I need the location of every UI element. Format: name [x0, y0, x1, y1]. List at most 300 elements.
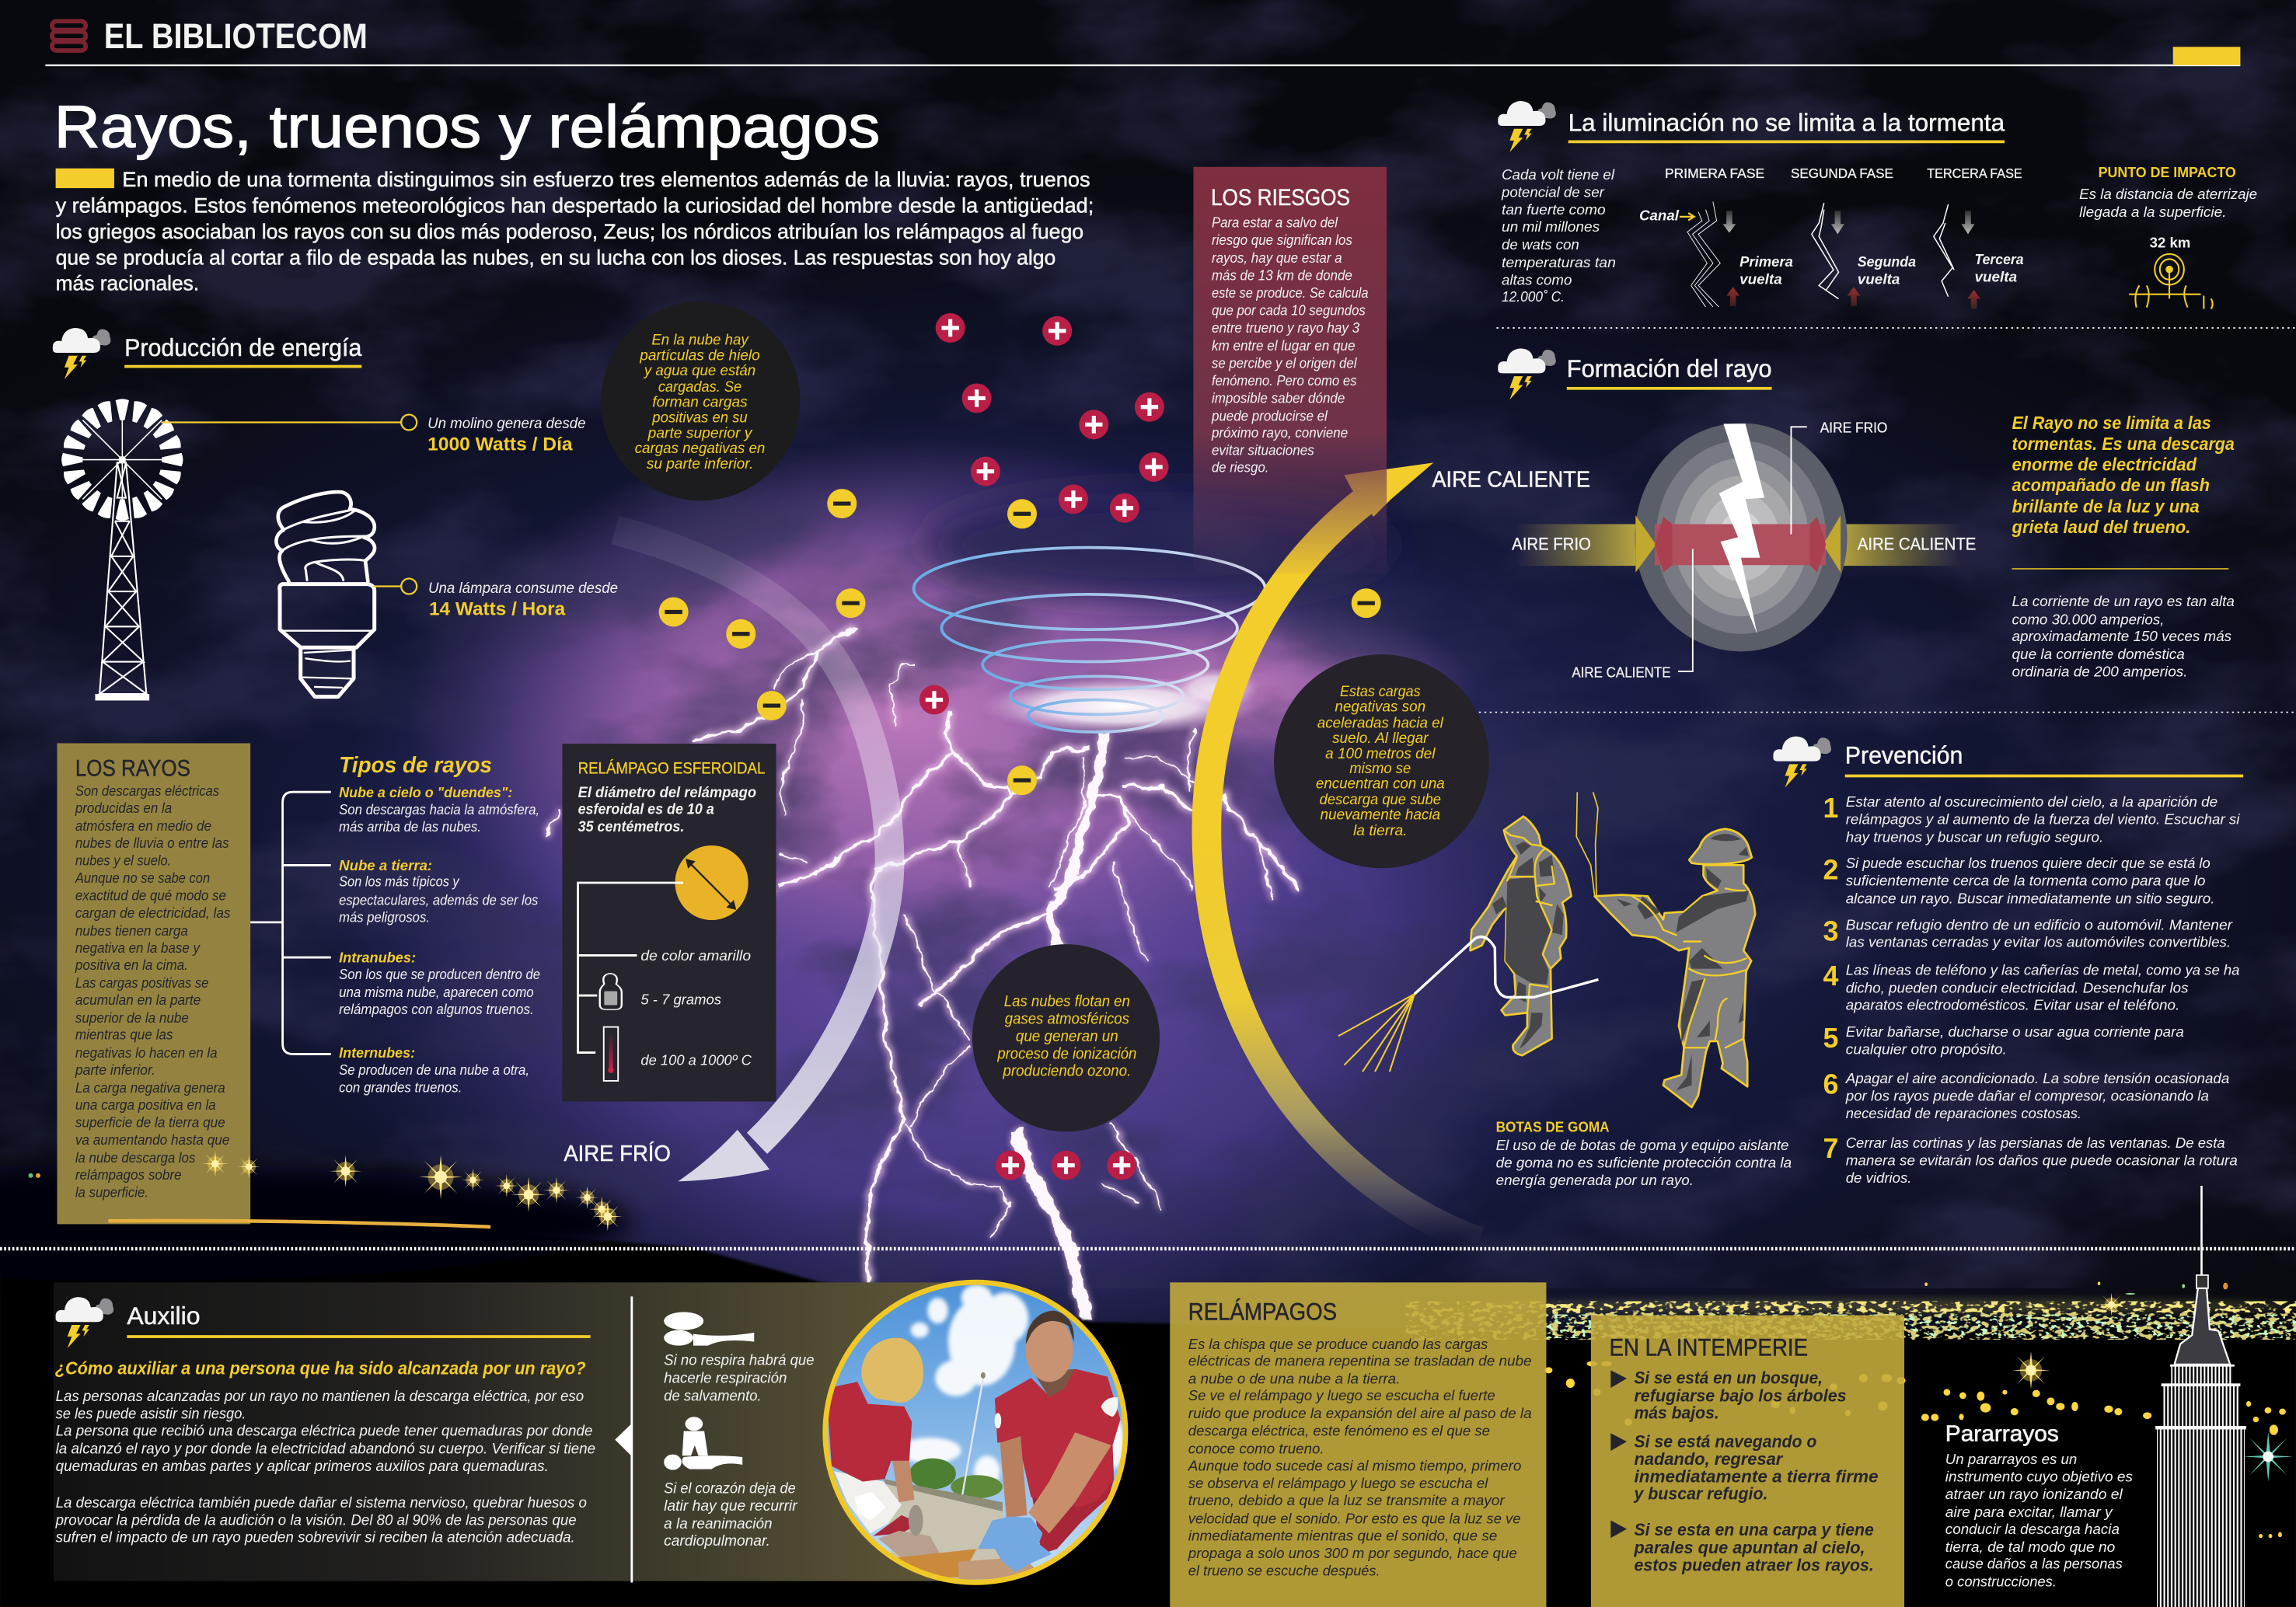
icon: impact target [2129, 254, 2213, 309]
label: aire caliente: AIRE CALIENTE [1432, 466, 1590, 491]
icon: storm cloud [55, 1297, 113, 1348]
callout circle: negative charges: la tierra. [1353, 822, 1408, 839]
water spray [1338, 994, 1415, 1072]
text: CPR: Si el corazón deja de [664, 1481, 796, 1497]
callout: lamp consumption: Una lámpara consume desde [428, 580, 618, 597]
header bar [45, 16, 2240, 66]
text: botas de goma: El uso de de botas de goma y equipo aislante [1496, 1137, 1788, 1153]
body text: km entre el lugar en que [1212, 338, 1356, 354]
callout circle: cloud charges: cargadas. Se [658, 378, 741, 396]
block: tipos de rayos: una misma nube, aparecen como [339, 984, 534, 1000]
bullet texts: Si se esta en una carpa y tiene [1634, 1520, 1874, 1539]
body: trueno, debido a que la luz se transmite a mayor [1188, 1492, 1505, 1508]
body: La carga negativa genera [75, 1079, 225, 1096]
body [1945, 1451, 2134, 1589]
panel: Los rayos [57, 743, 250, 1224]
body text: Para estar a salvo del [1212, 215, 1338, 231]
icon: thermometer [604, 1027, 618, 1081]
callout circle: negative charges: a 100 metros del [1325, 745, 1436, 762]
body: el trueno se escuche después. [1188, 1563, 1380, 1579]
icon: windmill [61, 399, 183, 700]
bullet texts: nadando, regresar [1634, 1449, 1784, 1469]
body: Las cargas positivas se [75, 974, 208, 991]
body text: provocar la pérdida de la audición o la visión. Del 80 al 90% de las personas que [55, 1512, 577, 1529]
body: conoce como trueno. [1188, 1440, 1324, 1456]
text: CPR: cardiopulmonar. [664, 1533, 770, 1549]
section: prevención heading [1773, 737, 2243, 788]
arrows: air pressing [1635, 515, 1841, 573]
section: iluminación heading: La iluminación no se limita a la tormenta [1568, 110, 2005, 137]
body: descarga eléctrica, este fenómeno es el que se [1188, 1423, 1490, 1439]
body text: se les puede asistir sin riesgo. [56, 1407, 246, 1423]
label: temperature: de 100 a 1000º C [640, 1052, 752, 1068]
panel: relámpago esferoidal [562, 744, 776, 1101]
block: punto de impacto: Es la distancia de aterrizaje [2079, 186, 2257, 202]
bullet texts: estos pueden atraer los rayos. [1634, 1555, 1874, 1574]
section: prevención heading: Prevención [1845, 741, 1963, 769]
block: punto de impacto: PUNTO DE IMPACTO [2099, 164, 2236, 180]
block: tipos de rayos: más peligrosos. [339, 909, 430, 926]
text: yellow statement: El Rayo no se limita a las [2012, 413, 2211, 433]
body text: fenómeno. Pero como es [1212, 373, 1356, 389]
concentric ellipses [1635, 423, 1848, 651]
panel: Auxilio [54, 1282, 947, 1583]
intro: El diámetro del relámpago [578, 785, 756, 801]
body: inmediatamente mientras que el sonido, que se [1188, 1528, 1497, 1544]
text: CPR [664, 1481, 798, 1549]
text: CPR: latir hay que recurrir [664, 1498, 798, 1515]
section: formación heading [1498, 348, 1772, 399]
arrow: cold air descending [615, 530, 890, 1181]
bullet texts: y buscar refugio. [1633, 1484, 1767, 1504]
lightning: first phase [1687, 201, 1720, 307]
icon: storm cloud [1773, 737, 1831, 788]
body: cause daños a las personas [1945, 1556, 2123, 1572]
arrows: red up [1726, 287, 1980, 309]
body text: Las personas alcanzadas por un rayo no mantienen la descarga eléctrica, por eso [56, 1389, 584, 1405]
callout circle: cloud charges: y agua que están [643, 362, 755, 379]
numbers: 3 [1823, 915, 1838, 946]
block: tipos de rayos: relámpagos con algunos truenos. [339, 1001, 534, 1017]
body: negativas lo hacen en la [75, 1044, 218, 1061]
callout circle: cloud charges: cargas negativas en [635, 440, 765, 457]
lightning: third phase [1934, 204, 1954, 297]
text: current: La corriente de un rayo es tan alta [2012, 593, 2235, 609]
text: current: que la corriente doméstica [2012, 646, 2185, 662]
hose [1415, 937, 1598, 997]
body: Se ve el relámpago y luego se escucha el fuerte [1188, 1387, 1495, 1403]
intro text: más racionales. [56, 272, 199, 295]
text: botas de goma: de goma no es suficiente protección contra la [1496, 1154, 1792, 1170]
panel: relámpago esferoidal: esferoidal es de 10 a [578, 801, 714, 817]
body: superficie de la tierra que [75, 1114, 225, 1131]
icon: storm cloud [52, 328, 110, 379]
step texts: Cerrar las cortinas y las persianas de las ventanas. De esta [1846, 1135, 2225, 1151]
logo wordmark: EL BIBLIOTECOM [104, 16, 368, 56]
body: conducir la descarga hacia [1945, 1521, 2120, 1537]
callout circle: cloud charges: partículas de hielo [639, 347, 760, 364]
block: tipos de rayos: espectaculares, además de ser los [339, 891, 538, 908]
list: prevention steps [1823, 793, 2240, 1186]
body: Son descargas eléctricas [75, 783, 219, 799]
step texts: de vidrios. [1846, 1170, 1911, 1186]
body: parte inferior. [75, 1061, 155, 1078]
heading: LOS RIESGOS [1211, 186, 1350, 211]
block: punto de impacto: llegada a la superficie. [2079, 204, 2227, 220]
block: tipos de rayos: Son los más típicos y [339, 873, 460, 890]
block: punto de impacto: 32 km [2150, 234, 2190, 250]
divider with pointer [615, 1296, 633, 1583]
callout circle: ionization: Las nubes flotan en [1004, 993, 1130, 1010]
callout circle: cloud charges: su parte inferior. [647, 455, 753, 472]
body: aire para excitar, llamar y [1945, 1504, 2113, 1520]
body text: La descarga eléctrica también puede dañar el sistema nervioso, quebrar huesos o [56, 1495, 587, 1511]
body: Es la chispa que se produce cuando las cargas [1188, 1336, 1488, 1352]
patient and mask [873, 1505, 1044, 1580]
callout circle: negative charges: descarga que sube [1320, 791, 1441, 808]
leader: aire caliente [1678, 549, 1693, 671]
heading: Tipos de rayos [339, 752, 492, 777]
icon: storm cloud [1498, 348, 1556, 399]
text: current [2012, 593, 2235, 679]
intro text: los griegos asociaban los rayos con su dios más poderoso, Zeus; los nórdicos atribuían los relámpagos al fuego [56, 220, 1083, 243]
photo: paramedics performing CPR [816, 1274, 1137, 1591]
labels: AIRE FRIO [1512, 534, 1591, 553]
background: dark horizon and city ground [0, 1164, 2296, 1607]
panel: Relámpagos [1170, 1282, 1546, 1607]
body: se observa el relámpago y luego se escucha el [1188, 1475, 1488, 1491]
step texts: Evitar bañarse, ducharse o usar agua corriente para [1846, 1023, 2184, 1040]
labels: AIRE CALIENTE [1858, 534, 1976, 553]
divider: dotted [1479, 712, 2296, 713]
man [978, 1311, 1121, 1572]
section: iluminación heading [1498, 101, 2005, 152]
block: tipos de rayos: Internubes: [339, 1044, 415, 1061]
labels: vueltas: vuelta [1974, 269, 2017, 285]
block: pararrayos [1945, 1421, 2134, 1589]
body text: La persona que recibió una descarga eléctrica puede tener quemaduras por donde [56, 1424, 592, 1440]
woman [826, 1338, 923, 1533]
body text: puede producirse el [1211, 408, 1328, 424]
body text: sufren el impacto de un rayo pueden sobrevivir si reciben la atención adecuada. [56, 1530, 575, 1546]
body [1188, 1336, 1532, 1579]
text: breathing: Si no respira habrá que [664, 1353, 815, 1369]
bullet texts: Si se está en un bosque, [1634, 1368, 1823, 1388]
intro text: En medio de una tormenta distinguimos sin esfuerzo tres elementos además de la lluvia: rayos, truenos [122, 168, 1090, 191]
lightning: second phase [1812, 203, 1839, 299]
body: atmósfera en medio de [75, 817, 211, 834]
icon: lightning bolt [1719, 424, 1764, 634]
body: superior de la nube [75, 1009, 189, 1026]
intro text [56, 168, 1094, 295]
icon: logo stack [52, 21, 85, 51]
heading: Producción de energía: Producción de energía [124, 334, 362, 361]
body: cargan de electricidad, las [75, 905, 231, 921]
callout circle: negative charges: Estas cargas [1340, 683, 1421, 700]
connector [578, 883, 683, 1053]
step texts: manera se evitarán los daños que puede ocasionar la rotura [1846, 1152, 2238, 1169]
text: yellow statement: tormentas. Es una descarga [2012, 434, 2235, 454]
block: tipos de rayos: Son los que se producen dentro de [339, 966, 540, 982]
intro text: que se producía al cortar a filo de espada las nubes, en su lucha con los dioses. Las respuestas son hoy algo [56, 246, 1056, 269]
body text: la alcanzó el rayo y por donde la electricidad abandonó su cuerpo. Verificar si tiene [56, 1441, 595, 1457]
bullet texts: más bajos. [1634, 1403, 1719, 1423]
step texts: hay truenos y buscar un refugio seguro. [1846, 828, 2103, 845]
body text: evitar situaciones [1212, 443, 1314, 458]
callout circle: ionization: produciendo ozono. [1002, 1063, 1131, 1080]
text: botas de goma [1496, 1118, 1792, 1188]
icon: ball lightning [675, 845, 748, 920]
title: Rayos, truenos y relámpagos [54, 93, 880, 160]
text: CPR: a la reanimación [664, 1516, 773, 1532]
heading: RELÁMPAGO ESFEROIDAL [578, 758, 765, 778]
numbers: 2 [1823, 854, 1838, 885]
block: punto de impacto [2079, 164, 2257, 309]
text: current: ordinaria de 200 amperios. [2012, 663, 2188, 679]
labels: vueltas: Tercera [1974, 251, 2024, 267]
body: velocidad que el sonido. Por esto es que la luz se ve [1188, 1510, 1520, 1526]
labels: AIRE CALIENTE [1572, 664, 1671, 680]
body: va aumentando hasta que [75, 1131, 229, 1148]
callout circle: cloud charges: positivas en su [651, 410, 748, 427]
diagram: lightning formation [1512, 420, 1976, 680]
diagram: three lightning phases [1639, 201, 2024, 309]
callout: lamp consumption [373, 579, 618, 619]
step texts: cualquier otro propósito. [1846, 1041, 2007, 1057]
divider: thick dotted [0, 1248, 2296, 1250]
labels: vueltas: vuelta [1739, 270, 1782, 287]
body: propaga a solo unos 300 m por segundo, hace que [1188, 1545, 1517, 1561]
panel: relámpago esferoidal: 35 centémetros. [578, 819, 684, 835]
step texts: relámpagos y al aumento de la fuerza del viento. Escuchar si [1846, 811, 2240, 828]
text: volt: un mil millones [1502, 218, 1600, 235]
illustration: skyscraper with lightning rod [2155, 1186, 2246, 1607]
block: tipos de rayos: Intranubes: [339, 950, 416, 966]
bullet texts [1633, 1368, 1879, 1574]
body: Aunque todo sucede casi al mismo tiempo, primero [1188, 1457, 1521, 1473]
callout circle: ionization: gases atmosféricos [1005, 1010, 1129, 1027]
body text: imposible saber dónde [1212, 391, 1345, 406]
text: volt [1501, 166, 1616, 305]
step texts: Las líneas de teléfono y las cañerías de metal, como ya se ha [1846, 962, 2239, 978]
phase headings: SEGUNDA FASE [1791, 166, 1893, 181]
body: exactitud de qué modo se [75, 887, 226, 904]
header yellow tab [2173, 47, 2240, 65]
step texts: por los rayos puede dañar el compresor, ocasionando la [1845, 1088, 2209, 1104]
callout: windmill output: 1000 Watts / Día [427, 434, 573, 455]
body: a nube o de una nube a la tierra. [1188, 1370, 1400, 1386]
label: canal: Canal [1639, 207, 1680, 224]
background: ground lights [29, 1151, 623, 1231]
text: breathing: de salvamento. [664, 1388, 762, 1404]
phase headings: TERCERA FASE [1927, 166, 2022, 181]
callout circle: negative charges: encuentran con una [1316, 776, 1445, 793]
bullets [1610, 1370, 1627, 1538]
figure: left worker [1471, 817, 1572, 1055]
body text [55, 1389, 595, 1546]
body: positiva en la cima. [75, 957, 188, 973]
body: Aunque no se sabe con [75, 870, 210, 886]
body: nubes y el suelo. [75, 852, 171, 868]
body text: próximo rayo, conviene [1211, 425, 1348, 441]
text: volt: de wats con [1502, 236, 1579, 253]
block: tipos de rayos: Se producen de una nube a otra, [339, 1061, 529, 1078]
panel: Los riesgos [1193, 167, 1387, 574]
callout circle: negative charges: nuevamente hacia [1321, 807, 1440, 824]
body: eléctricas de manera repentina se trasladan de nube [1188, 1353, 1532, 1369]
text: volt: Cada volt tiene el [1502, 166, 1615, 183]
step texts: Estar atento al oscurecimiento del cielo, a la aparición de [1846, 793, 2217, 810]
icon: light bulb [276, 492, 375, 697]
background: city lights [1406, 1281, 2296, 1538]
heading: EN LA INTEMPERIE [1609, 1334, 1808, 1361]
bullet texts: inmediatamente a tierra firme [1634, 1467, 1879, 1487]
text: current: aproximadamente 150 veces más [2012, 628, 2232, 644]
labels [1512, 420, 1976, 680]
text: yellow statement [2012, 413, 2235, 537]
labels: vueltas: Segunda [1858, 253, 1916, 270]
text: yellow statement: acompañado de un flash [2012, 475, 2210, 495]
body: ruido que produce la expansión del aire al paso de la [1188, 1405, 1532, 1421]
hat [1689, 829, 1752, 864]
numbers: 4 [1823, 960, 1838, 992]
text: volt: temperaturas tan [1502, 254, 1616, 270]
arrow: canal [1680, 213, 1694, 221]
body: tierra, de tal modo que no [1945, 1539, 2115, 1555]
heading: RELÁMPAGOS [1188, 1298, 1337, 1325]
icon: storm cloud [1498, 101, 1556, 152]
bullet texts: parales que apuntan al cielo, [1633, 1538, 1865, 1557]
body: instrumento cuyo objetivo es [1945, 1469, 2134, 1485]
text: volt: 12.000˚ C. [1502, 288, 1565, 305]
label: aire frío: AIRE FRÍO [564, 1141, 671, 1166]
numbers: 7 [1823, 1133, 1838, 1164]
icon: weight [600, 974, 622, 1009]
text: volt: altas como [1502, 271, 1572, 288]
charges: positive [919, 313, 1169, 1180]
label: color: de color amarillo [640, 947, 751, 964]
arrows: grey down [1722, 211, 1974, 234]
body: negativa en la base y [75, 939, 201, 956]
heading: Auxilio [127, 1302, 201, 1330]
heading: Pararrayos [1945, 1421, 2059, 1446]
body [75, 783, 231, 1201]
block: tipos de rayos: con grandes truenos. [339, 1079, 462, 1095]
body text: que por cada 10 segundos [1212, 303, 1366, 319]
body: mientras que las [75, 1027, 173, 1043]
body: nubes de lluvia o entre las [75, 835, 229, 851]
block: tipos de rayos: Nube a tierra: [339, 857, 432, 873]
text: yellow statement: grieta laud del trueno. [2012, 517, 2190, 537]
text: volt: potencial de ser [1501, 183, 1605, 200]
body: o construcciones. [1945, 1573, 2057, 1589]
callout circle: cloud charges: forman cargas [652, 394, 748, 411]
callout circle: negative charges [1274, 654, 1489, 868]
callout: lamp consumption: 14 Watts / Hora [429, 598, 566, 619]
figure: right worker [1595, 829, 1755, 1107]
body: atraer un rayo ionizando el [1945, 1486, 2123, 1502]
body text: más de 13 km de donde [1212, 267, 1352, 283]
body: una carga positiva en la [75, 1096, 216, 1113]
text: yellow statement: enorme de electricidad [2012, 455, 2197, 475]
text: volt: tan fuerte como [1502, 201, 1606, 218]
heading: Producción de energía [52, 328, 362, 379]
callout circle: ionization [972, 944, 1160, 1131]
block: tipos de rayos: más arriba de las nubes. [339, 818, 481, 835]
body: nubes tienen carga [75, 922, 188, 939]
numbers: 6 [1823, 1068, 1838, 1100]
step texts: aparatos electrodomésticos. Evitar usar el teléfono. [1846, 996, 2179, 1013]
body: la nube descarga los [75, 1149, 195, 1166]
callout circle: negative charges: negativas son [1335, 699, 1425, 716]
body: Un pararrayos es un [1945, 1451, 2077, 1467]
body: acumulan en la parte [75, 992, 201, 1008]
panel: En la intemperie [1591, 1316, 1904, 1607]
step texts: Apagar el aire acondicionado. La sobre tensión ocasionada [1845, 1070, 2229, 1086]
block: tipos de rayos: Son descargas hacia la atmósfera, [339, 801, 539, 817]
step texts: necesidad de reparaciones costosas. [1846, 1105, 2081, 1121]
callout circle: negative charges: suelo. Al llegar [1332, 730, 1429, 747]
text: current: como 30.000 amperios, [2012, 612, 2164, 628]
body text: riesgo que significan los [1212, 232, 1352, 248]
question: ¿Cómo auxiliar a una persona que ha sido alcanzada por un rayo? [55, 1358, 586, 1379]
section: formación heading: Formación del rayo [1567, 355, 1772, 382]
photo: lightning bolts [544, 628, 1297, 1322]
step texts: Buscar refugio dentro de un edificio o automóvil. Mantener [1846, 916, 2233, 932]
icon: rescue breathing [664, 1312, 754, 1346]
body: producidas en la [75, 800, 172, 816]
step texts: las ventanas cerradas y evitar los automóviles convertibles. [1846, 933, 2231, 950]
step texts: dicho, pueden conducir electricidad. Desenchufar los [1846, 979, 2189, 995]
callout circle: cloud charges: En la nube hay [651, 332, 749, 349]
labels: vueltas: Primera [1739, 253, 1793, 270]
text: botas de goma: BOTAS DE GOMA [1496, 1118, 1610, 1135]
callout circle: negative charges: mismo se [1349, 760, 1411, 777]
heading: LOS RAYOS [75, 756, 190, 781]
illustration: workers with rubber boots [1338, 793, 1755, 1107]
block: tipos de rayos: Nube a cielo o "duendes": [339, 784, 512, 800]
text: breathing [664, 1353, 815, 1404]
body: relámpagos sobre [75, 1166, 182, 1183]
text: yellow statement: brillante de la luz y una [2012, 496, 2200, 516]
body text: entre trueno y rayo hay 3 [1212, 320, 1359, 336]
wires [1576, 793, 1598, 895]
callout circle: cloud charges: parte superior y [647, 424, 753, 441]
step texts: suficientemente cerca de la tormenta como para que lo [1846, 872, 2205, 888]
text: botas de goma: energía generada por un rayo. [1496, 1172, 1694, 1188]
arrow: warm air rising [1206, 462, 1479, 1242]
callout circle: negative charges: aceleradas hacia el [1317, 714, 1443, 731]
numbers: 5 [1823, 1023, 1838, 1054]
callout: windmill output: Un molino genera desde [427, 415, 586, 432]
charges: negative [659, 489, 1381, 795]
divider: dotted [1496, 327, 2296, 329]
diagram: swirling rings [914, 548, 1265, 732]
numbers [1823, 793, 1838, 1164]
bullet texts: Si se está navegando o [1634, 1432, 1816, 1452]
air bands [1516, 524, 1961, 566]
callout circle: ionization: que generan un [1016, 1028, 1118, 1045]
step texts: alcance un rayo. Buscar inmediatamente un sitio seguro. [1846, 890, 2214, 906]
bullet texts: refugiarse bajo los árboles [1634, 1386, 1847, 1405]
callout circle: ionization: proceso de ionización [996, 1045, 1136, 1062]
text: breathing: hacerle respiración [664, 1371, 787, 1387]
numbers: 1 [1823, 793, 1838, 824]
body text: este se produce. Se calcula [1212, 285, 1369, 301]
labels: vueltas: vuelta [1858, 270, 1900, 287]
label: weight: 5 - 7 gramos [640, 991, 722, 1007]
icon: CPR [664, 1417, 742, 1470]
